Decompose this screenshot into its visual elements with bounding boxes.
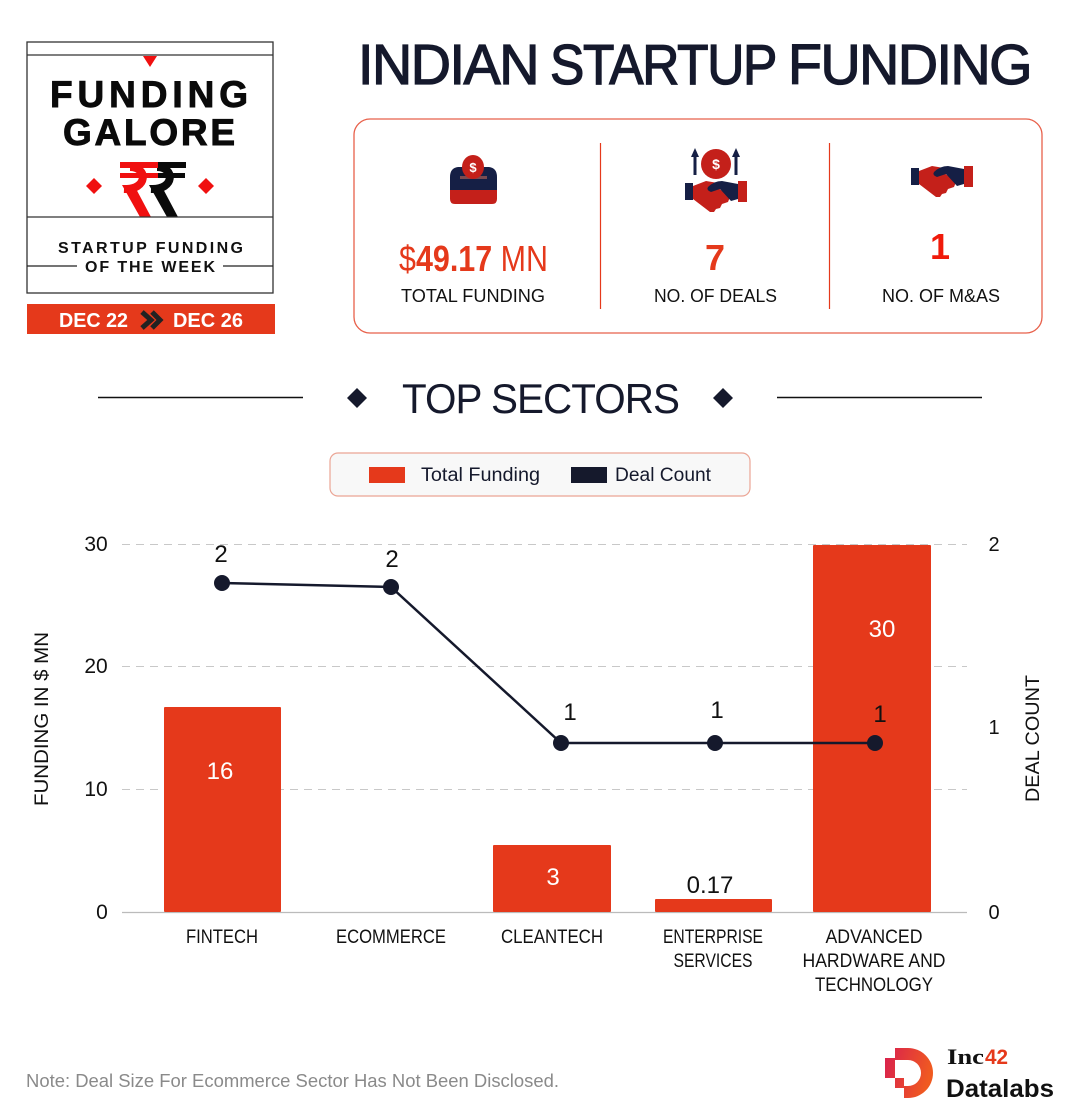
deal count labels: 2 bbox=[214, 541, 228, 568]
title bbox=[358, 33, 1031, 97]
logo: Inc42 Datalabs bbox=[885, 1044, 1054, 1103]
right axis labels: 1 bbox=[988, 717, 1000, 739]
deal count labels: 2 bbox=[385, 546, 399, 573]
category labels: SERVICES bbox=[674, 951, 752, 972]
badge subtitle: STARTUP FUNDING bbox=[58, 240, 243, 257]
bar value labels bbox=[207, 616, 895, 899]
icon: Datalabs D mark bbox=[885, 1048, 933, 1098]
stat: number of deals: NO. OF DEALS bbox=[654, 286, 777, 306]
stat: number of deals: 7 bbox=[705, 237, 725, 278]
right axis labels bbox=[988, 534, 1000, 924]
section heading: top sectors: TOP SECTORS bbox=[402, 375, 679, 422]
category labels: ADVANCED bbox=[826, 927, 922, 948]
section heading: top sectors bbox=[98, 375, 982, 422]
bars bbox=[164, 545, 931, 912]
category labels: HARDWARE AND bbox=[802, 951, 946, 972]
bar value labels: 16 bbox=[207, 758, 233, 785]
left axis title: FUNDING IN $ MN bbox=[32, 632, 53, 806]
badge title: GALORE bbox=[63, 112, 235, 153]
right axis labels: 0 bbox=[988, 902, 1000, 924]
legend: Deal Count bbox=[615, 465, 712, 486]
icon: coin in box bbox=[450, 155, 497, 204]
left axis labels: 20 bbox=[84, 655, 108, 678]
stat: number of M&As: 1 bbox=[930, 226, 950, 267]
category labels: ENTERPRISE bbox=[663, 927, 763, 948]
left axis labels bbox=[84, 533, 108, 924]
left axis labels: 0 bbox=[96, 901, 108, 924]
icon: handshake with coin and arrows bbox=[685, 148, 747, 212]
icon: handshake with coin and arrows: $ bbox=[712, 156, 720, 172]
deal count labels: 1 bbox=[873, 701, 887, 728]
left axis labels: 10 bbox=[84, 778, 108, 801]
left axis labels: 30 bbox=[84, 533, 108, 556]
stat: total funding: $49.17 MN bbox=[399, 238, 548, 279]
logo: Inc42 Datalabs: Datalabs bbox=[946, 1075, 1054, 1103]
category labels bbox=[186, 927, 946, 996]
stat: number of M&As: NO. OF M&AS bbox=[882, 286, 1000, 306]
deal count labels: 1 bbox=[710, 697, 724, 724]
bar value labels: 3 bbox=[546, 864, 560, 891]
panel: key stats bbox=[354, 119, 1042, 333]
category labels: CLEANTECH bbox=[501, 927, 603, 948]
chart: funding and deal count by sector bbox=[32, 533, 1044, 996]
date range banner: DEC 22 bbox=[59, 310, 128, 332]
logo: Inc42 Datalabs: Inc bbox=[947, 1044, 984, 1069]
badge subtitle: OF THE WEEK bbox=[85, 259, 215, 276]
bar value labels: 30 bbox=[869, 616, 895, 643]
category labels: FINTECH bbox=[186, 927, 258, 948]
stat: total funding: TOTAL FUNDING bbox=[401, 286, 545, 306]
icon: handshake bbox=[911, 166, 973, 197]
deal count line bbox=[214, 575, 883, 751]
badge: funding galore bbox=[27, 42, 273, 293]
right axis title: DEAL COUNT bbox=[1023, 675, 1044, 802]
legend bbox=[330, 453, 750, 496]
title: FUNDING bbox=[788, 33, 1031, 97]
badge title: FUNDING bbox=[50, 74, 248, 115]
stat: number of deals bbox=[654, 237, 777, 306]
title: STARTUP bbox=[550, 33, 776, 97]
category labels: TECHNOLOGY bbox=[815, 975, 933, 996]
badge subtitle bbox=[27, 240, 273, 276]
date range banner: DEC 26 bbox=[173, 310, 243, 332]
badge title bbox=[50, 74, 248, 153]
date range banner bbox=[27, 304, 275, 334]
deal count labels bbox=[214, 541, 887, 728]
right axis labels: 2 bbox=[988, 534, 1000, 556]
title: INDIAN bbox=[358, 33, 538, 97]
icon: coin in box: $ bbox=[469, 160, 477, 175]
category labels: ECOMMERCE bbox=[336, 927, 446, 948]
stat: total funding bbox=[399, 238, 548, 306]
legend: Total Funding bbox=[421, 465, 540, 486]
stat: number of M&As bbox=[882, 226, 1000, 306]
icon: rupee symbols bbox=[86, 165, 214, 217]
deal count labels: 1 bbox=[563, 699, 577, 726]
footnote: Note: Deal Size For Ecommerce Sector Has Not Been Disclosed. bbox=[26, 1071, 559, 1091]
bar value labels: 0.17 bbox=[687, 872, 733, 899]
logo: Inc42 Datalabs: 42 bbox=[985, 1046, 1008, 1069]
